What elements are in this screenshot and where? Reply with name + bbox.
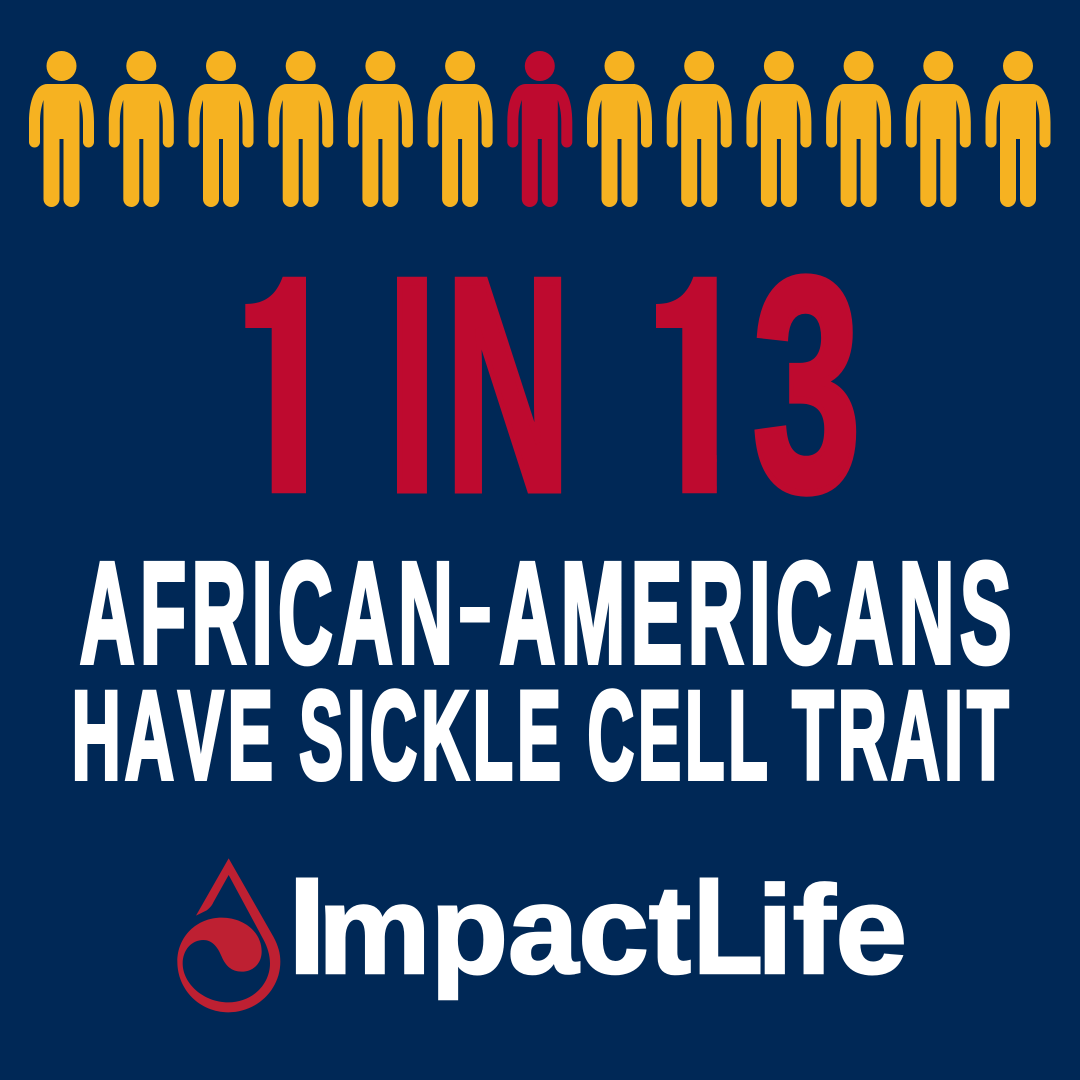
subheading line 2: CELL xyxy=(588,666,772,806)
logo wordmark: L xyxy=(693,850,763,1003)
subheading line 2: HAVE xyxy=(72,666,277,806)
headline: 1 in 13: 1 xyxy=(230,215,338,555)
logo wordmark: ife xyxy=(757,861,907,1000)
logo wordmark xyxy=(288,850,907,1003)
headline: 1 in 13: 1 xyxy=(640,215,749,555)
headline: 1 in 13 xyxy=(230,215,861,555)
ImpactLife logo xyxy=(177,850,907,1012)
subheading line 2 xyxy=(72,666,1013,806)
icon: blood drop with swirl xyxy=(177,858,280,1012)
row of 13 people icons, one highlighted xyxy=(29,51,1050,207)
headline: 1 in 13: N xyxy=(446,216,570,554)
logo wordmark: I xyxy=(288,850,326,1003)
headline: 1 in 13: I xyxy=(388,216,436,554)
subheading line 1: AFRICAN xyxy=(80,532,458,694)
subheading line 1: - xyxy=(458,548,492,665)
logo wordmark: mpact xyxy=(318,861,691,1000)
subheading line 2: SICKLE xyxy=(299,666,565,806)
headline: 1 in 13: 3 xyxy=(752,215,861,555)
